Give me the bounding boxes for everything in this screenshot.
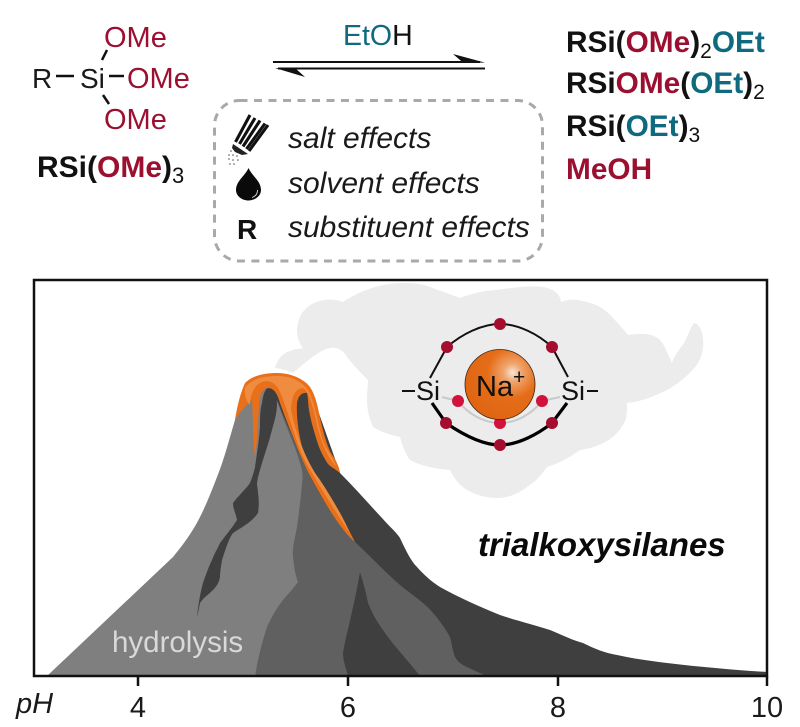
crown back bonds bbox=[442, 397, 560, 423]
text: salt effects: salt effects bbox=[288, 122, 431, 155]
axis labels: pH bbox=[15, 688, 53, 720]
lava highlight bbox=[245, 376, 350, 534]
products list bbox=[566, 26, 765, 186]
volcano bbox=[47, 373, 767, 676]
icon: solvent drop bbox=[236, 168, 261, 200]
text: solvent effects: solvent effects bbox=[288, 167, 480, 200]
products list: RSiOMe(OEt) bbox=[566, 67, 753, 100]
axis labels: 10 bbox=[751, 692, 783, 724]
left silicon: Si bbox=[416, 376, 440, 406]
text: substituent effects: substituent effects bbox=[288, 211, 530, 244]
axis labels: 8 bbox=[550, 692, 566, 724]
icon: salt shaker bbox=[228, 115, 268, 165]
crown ether complex bbox=[402, 318, 598, 451]
smoke cloud bbox=[275, 283, 703, 498]
dark streak on middle slope bbox=[343, 572, 420, 676]
axis labels: 4 bbox=[130, 692, 146, 724]
products list: 2 bbox=[700, 40, 712, 63]
products list: 2 bbox=[753, 81, 765, 104]
equilibrium arrows bbox=[273, 54, 485, 77]
crown top bonds bbox=[430, 324, 568, 378]
text: hydrolysis: hydrolysis bbox=[112, 626, 243, 659]
inner oxygens bbox=[452, 395, 548, 407]
right silicon: Si bbox=[561, 376, 585, 406]
oxygens bbox=[440, 318, 558, 451]
left silicon bbox=[402, 376, 440, 406]
axis labels: 6 bbox=[340, 692, 356, 724]
Na+ ion: Na bbox=[476, 371, 514, 403]
formula label: 3 bbox=[172, 163, 184, 188]
products list: MeOH bbox=[566, 153, 652, 186]
Na+ ion: + bbox=[513, 366, 525, 389]
lava bbox=[235, 373, 355, 542]
structure: RSi(OMe)3: OMe bbox=[104, 104, 167, 136]
icon: substituent R: R bbox=[237, 214, 257, 245]
structure: RSi(OMe)3: OMe bbox=[104, 22, 167, 54]
crown front bonds bbox=[432, 403, 567, 445]
back dark slope bbox=[250, 385, 767, 676]
products list: RSi(OEt) bbox=[566, 110, 689, 143]
panel: effects bbox=[214, 100, 542, 261]
Na+ ion bbox=[465, 350, 535, 420]
reagent: EtOH: EtOH bbox=[343, 20, 413, 52]
formula label: RSi(OMe) bbox=[37, 151, 172, 184]
axis labels bbox=[15, 688, 783, 724]
text: trialkoxysilanes: trialkoxysilanes bbox=[478, 526, 726, 563]
products list: 3 bbox=[689, 124, 700, 147]
back oxygen under ion bbox=[494, 417, 506, 429]
products list: OEt bbox=[712, 26, 765, 59]
structure: RSi(OMe)3: R bbox=[32, 63, 52, 94]
right silicon bbox=[561, 376, 598, 406]
front slope bbox=[47, 383, 303, 676]
dark lava channel bbox=[197, 388, 277, 618]
products list: RSi(OMe) bbox=[566, 26, 700, 59]
structure: RSi(OMe)3: OMe bbox=[127, 63, 190, 95]
plot frame and axis bbox=[34, 280, 767, 686]
middle slope bbox=[255, 403, 487, 676]
structure: RSi(OMe)3 bbox=[32, 22, 190, 136]
structure: RSi(OMe)3: Si bbox=[80, 63, 105, 94]
